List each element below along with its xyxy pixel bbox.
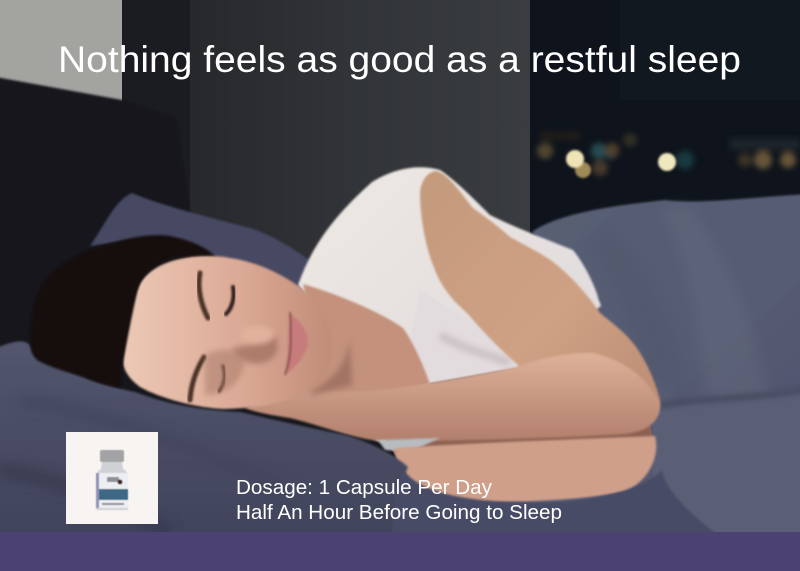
upper eyebrow [199, 273, 208, 318]
nose highlight [242, 326, 274, 344]
white shirt [298, 167, 601, 445]
neck shadow under jaw [310, 340, 352, 396]
title: Nothing feels as good as a restful sleep [58, 39, 741, 80]
bottle body [96, 462, 128, 510]
dosage text: Dosage: 1 Capsule Per Day [236, 476, 493, 499]
face [123, 256, 333, 409]
eye socket shadow [205, 350, 245, 395]
shirt hem between arms [378, 438, 440, 452]
city lights through window [537, 132, 800, 178]
nose shadow [232, 335, 278, 364]
front pillow [0, 341, 408, 540]
upper arm [420, 171, 660, 432]
bottom purple band [0, 532, 800, 571]
mouth corner and line [285, 312, 291, 375]
sleeping woman's head [30, 235, 352, 409]
product photo [66, 432, 158, 524]
duvet behind sleeper [420, 194, 800, 540]
neck and chest [290, 284, 430, 400]
headboard [0, 76, 190, 350]
back pillow [90, 193, 312, 290]
lower eyebrow [190, 357, 204, 400]
gap shadow between the two forearms [380, 425, 655, 455]
lower forearm [395, 436, 656, 502]
lower eyelashes [219, 366, 224, 391]
bottle cap [100, 450, 124, 462]
hair [30, 235, 214, 388]
dosage text [236, 476, 562, 524]
forearm and hand [245, 353, 660, 441]
upper eyelashes [226, 287, 234, 314]
bottle label [96, 473, 128, 508]
lower bedding [392, 470, 725, 540]
lips [286, 314, 308, 374]
dosage text: Half An Hour Before Going to Sleep [236, 501, 562, 524]
